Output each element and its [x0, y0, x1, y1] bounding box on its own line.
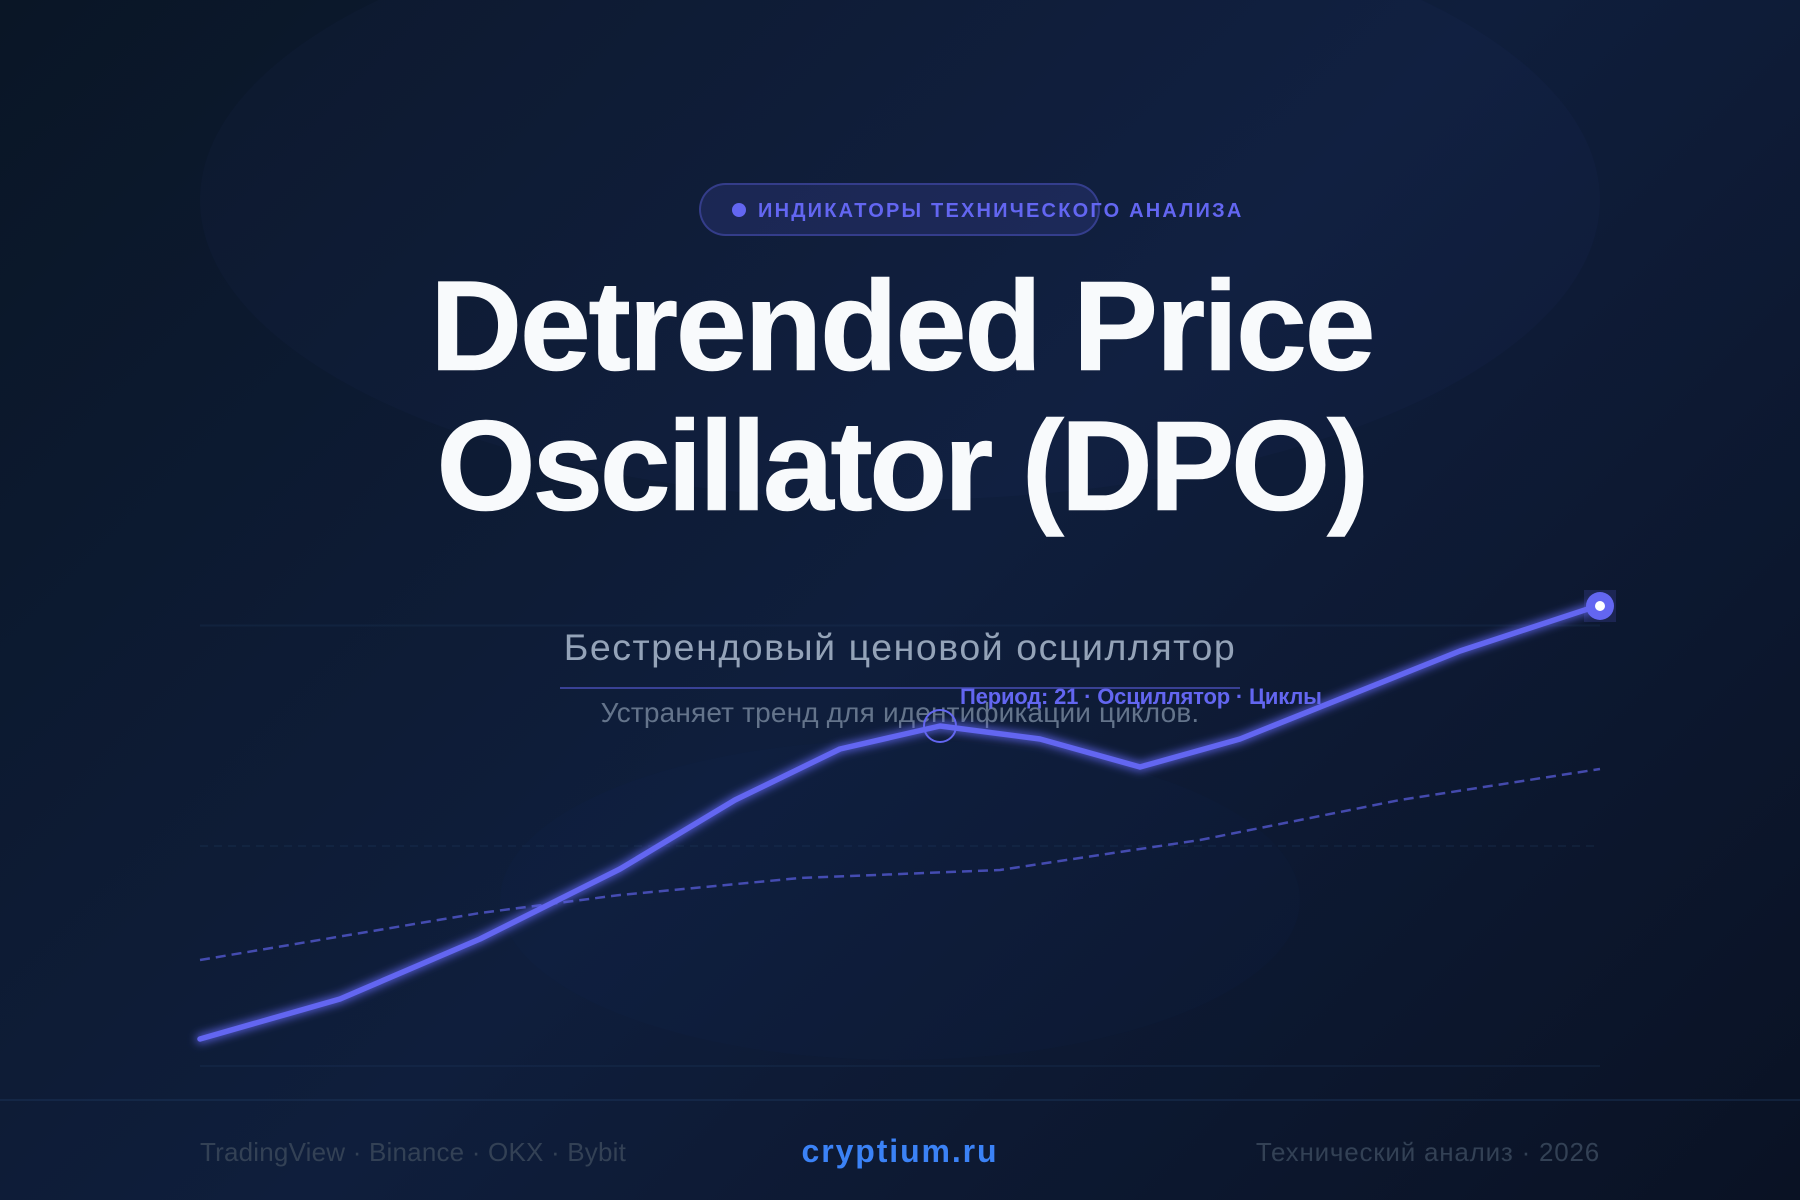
description: Устраняет тренд для идентификации циклов. [601, 697, 1199, 728]
price line [200, 605, 1600, 1039]
subtitle: Бестрендовый ценовой осциллятор [564, 626, 1236, 668]
badge text: ИНДИКАТОРЫ ТЕХНИЧЕСКОГО АНАЛИЗА [758, 200, 1244, 222]
footer right: Технический анализ · 2026 [1256, 1137, 1600, 1167]
background ellipse: bottom [500, 740, 1300, 1060]
end point marker [1584, 590, 1616, 622]
title [430, 255, 1373, 538]
divider [560, 687, 1240, 689]
background ellipse: top [200, 0, 1600, 500]
parameters label: Период: 21 · Осциллятор · Циклы [960, 684, 1322, 709]
trend line (dashed) [200, 769, 1600, 960]
badge dot [732, 203, 746, 217]
footer divider [0, 1099, 1800, 1101]
footer left: TradingView · Binance · OKX · Bybit [200, 1137, 626, 1167]
footer brand: cryptium.ru [802, 1133, 998, 1169]
badge [699, 183, 1100, 236]
peak marker [924, 710, 956, 742]
title: Oscillator (DPO) [436, 395, 1366, 538]
title: Detrended Price [430, 255, 1373, 398]
